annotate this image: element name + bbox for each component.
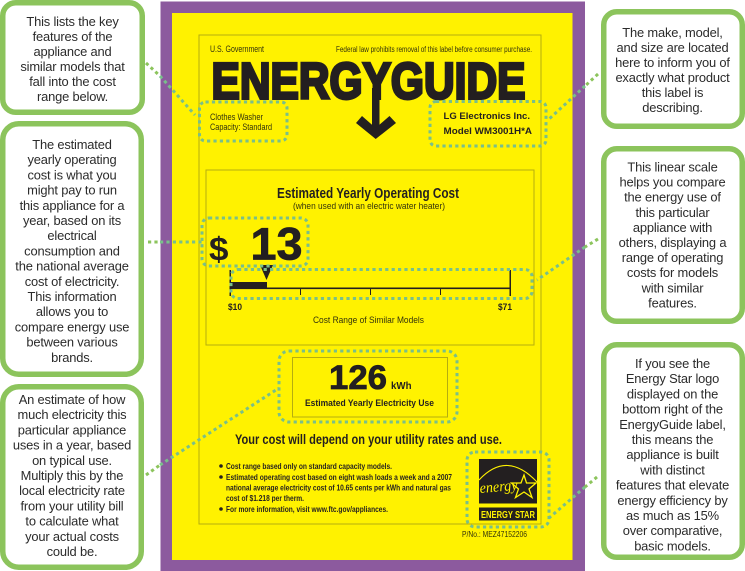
heading: EnergyGuide logo with arrow xyxy=(212,52,526,139)
panel: linear scale note: this particular xyxy=(635,205,710,220)
panel: linear scale note: the energy use of xyxy=(624,190,721,205)
panel: operating cost note: This information xyxy=(28,289,116,304)
dotted highlights and connectors xyxy=(146,63,598,527)
panel: electricity use note: on typical use. xyxy=(32,453,112,468)
make and model text xyxy=(444,111,532,137)
heading: EnergyGuide logo with arrow: ENERGYGUIDE xyxy=(212,52,526,110)
panel: operating cost note: year, based on its xyxy=(23,213,121,228)
header small print: Federal law prohibits removal of this label before consumer purchase. xyxy=(336,45,532,54)
panel: operating cost note: yearly operating xyxy=(28,152,117,167)
panel: electricity use note xyxy=(3,387,141,567)
panel: electricity use note: to calculate what xyxy=(25,514,119,529)
panel: make and model note: and size are located xyxy=(617,40,728,55)
panel: linear scale note: with similar xyxy=(641,280,704,295)
panel: linear scale note: others, displaying a xyxy=(619,235,727,250)
icon: energy star logo: ENERGY STAR xyxy=(481,509,535,521)
panel: make and model note: exactly what product xyxy=(615,70,730,85)
panel: estimated yearly electricity use xyxy=(292,358,448,417)
part number: P/No.: MEZ47152206 xyxy=(462,530,527,539)
header small print xyxy=(210,44,532,54)
panel: estimated yearly electricity use: Estimated Yearly Electricity Use xyxy=(305,398,434,409)
panel: electricity use note: from your utility bill xyxy=(20,498,124,513)
make and model text: LG Electronics Inc. xyxy=(444,111,530,122)
cost range scale xyxy=(228,265,513,326)
cost range scale: $10 xyxy=(228,302,242,313)
panel: estimated yearly electricity use: 126 xyxy=(329,359,387,397)
panel: make and model note: here to inform you of xyxy=(615,55,730,70)
appliance features text: Capacity: Standard xyxy=(210,122,272,132)
icon: energy star logo: energy xyxy=(479,478,519,497)
panel: operating cost note: might pay to run xyxy=(27,183,117,198)
panel: key features note: fall into the cost xyxy=(29,74,116,89)
panel: linear scale note: This linear scale xyxy=(627,160,718,174)
cost value: 13 xyxy=(250,218,302,270)
icon: energy star logo xyxy=(479,459,537,521)
panel: estimated yearly operating cost xyxy=(206,170,534,345)
panel: linear scale note: appliance with xyxy=(633,220,712,235)
panel: make and model note: The make, model, xyxy=(622,25,723,40)
panel: key features note: appliance and xyxy=(33,44,112,59)
cost value: $ xyxy=(209,230,228,268)
panel: energy star note: EnergyGuide label, xyxy=(619,417,726,432)
fine print bullets: cost of $1.218 per therm. xyxy=(226,493,304,503)
panel: electricity use note: your actual costs xyxy=(25,529,119,544)
panel: energy star note: bottom right of the xyxy=(622,402,723,417)
panel: electricity use note: local electricity rate xyxy=(19,483,125,498)
make and model text: Model WM3001H*A xyxy=(444,126,532,137)
panel: linear scale note: helps you compare xyxy=(619,175,726,190)
fine print bullets: Cost range based only on standard capacity models. xyxy=(226,461,392,471)
statement: cost depends on rates: Your cost will depend on your utility rates and use. xyxy=(235,431,502,447)
panel: energy star note: over comparative, xyxy=(623,523,722,538)
fine print bullets: Estimated operating cost based on eight wash loads a week and a 2007 xyxy=(226,472,452,482)
panel: make and model note xyxy=(604,12,742,126)
fine print bullets: national average electricity cost of 10.65 cents per kWh and natural gas xyxy=(226,482,451,492)
panel: electricity use note: An estimate of how xyxy=(19,392,126,407)
panel: operating cost note: compare energy use xyxy=(15,319,129,334)
panel: electricity use note: could be. xyxy=(47,544,97,559)
fine print bullets: For more information, visit www.ftc.gov/appliances. xyxy=(226,504,388,514)
cost subheading: (when used with an electric water heater) xyxy=(293,201,445,212)
panel: operating cost note: brands. xyxy=(51,350,93,365)
panel: energy star note: as much as 15% xyxy=(626,508,719,523)
panel: operating cost note: between various xyxy=(26,335,118,350)
panel: energy star note: energy efficiency by xyxy=(617,493,728,508)
panel: operating cost note: this appliance for a xyxy=(20,198,125,213)
panel: energy star note xyxy=(604,345,742,557)
panel: operating cost note: consumption and xyxy=(24,243,120,258)
panel: operating cost note: cost of electricity. xyxy=(25,274,119,289)
panel: key features note xyxy=(3,3,142,112)
panel: electricity use note: particular appliance xyxy=(18,422,126,437)
cost range scale: Cost Range of Similar Models xyxy=(313,315,424,326)
panel: operating cost note: allows you to xyxy=(36,304,108,319)
fine print bullets xyxy=(219,461,452,514)
panel: linear scale note: costs for models xyxy=(627,265,718,280)
panel: key features note: range below. xyxy=(37,89,108,104)
panel: electricity use note: Multiply this by the xyxy=(21,468,123,483)
panel: operating cost note: the national average xyxy=(15,259,129,274)
panel: energy star note: with distinct xyxy=(639,462,705,477)
panel: energy star note: this means the xyxy=(632,432,713,447)
panel: operating cost note: The estimated xyxy=(32,137,112,152)
panel: key features note: features of the xyxy=(33,29,112,44)
panel: energy star note: If you see the xyxy=(635,356,710,371)
panel: linear scale note xyxy=(604,149,742,321)
panel: energy star note: appliance is built xyxy=(626,447,719,462)
panel: energy star note: displayed on the xyxy=(627,386,718,401)
panel: key features note: This lists the key xyxy=(26,14,119,29)
cost range scale: $71 xyxy=(498,302,513,313)
panel: make and model note: describing. xyxy=(642,100,703,115)
panel: operating cost note: cost is what you xyxy=(28,167,116,182)
panel: make and model note: this label is xyxy=(642,85,703,100)
panel: electricity use note: much electricity this xyxy=(18,407,126,422)
panel: linear scale note: features. xyxy=(648,295,697,310)
panel: electricity use note: uses in a year, based xyxy=(13,438,131,453)
cost heading: Estimated Yearly Operating Cost xyxy=(277,186,459,202)
cost value xyxy=(209,218,302,270)
panel: energy star note: basic models. xyxy=(634,538,711,553)
appliance features text xyxy=(210,112,272,132)
panel: energy star note: Energy Star logo xyxy=(626,371,719,386)
panel: estimated yearly electricity use: kWh xyxy=(391,381,412,392)
header small print: U.S. Government xyxy=(210,44,264,54)
panel: key features note: similar models that xyxy=(20,59,125,74)
panel: energy guide label xyxy=(160,2,585,571)
appliance features text: Clothes Washer xyxy=(210,112,263,122)
panel: linear scale note: range of operating xyxy=(622,250,723,265)
panel: operating cost note: electrical xyxy=(47,228,97,243)
panel: operating cost note xyxy=(3,124,141,374)
panel: energy star note: features that elevate xyxy=(616,478,729,493)
